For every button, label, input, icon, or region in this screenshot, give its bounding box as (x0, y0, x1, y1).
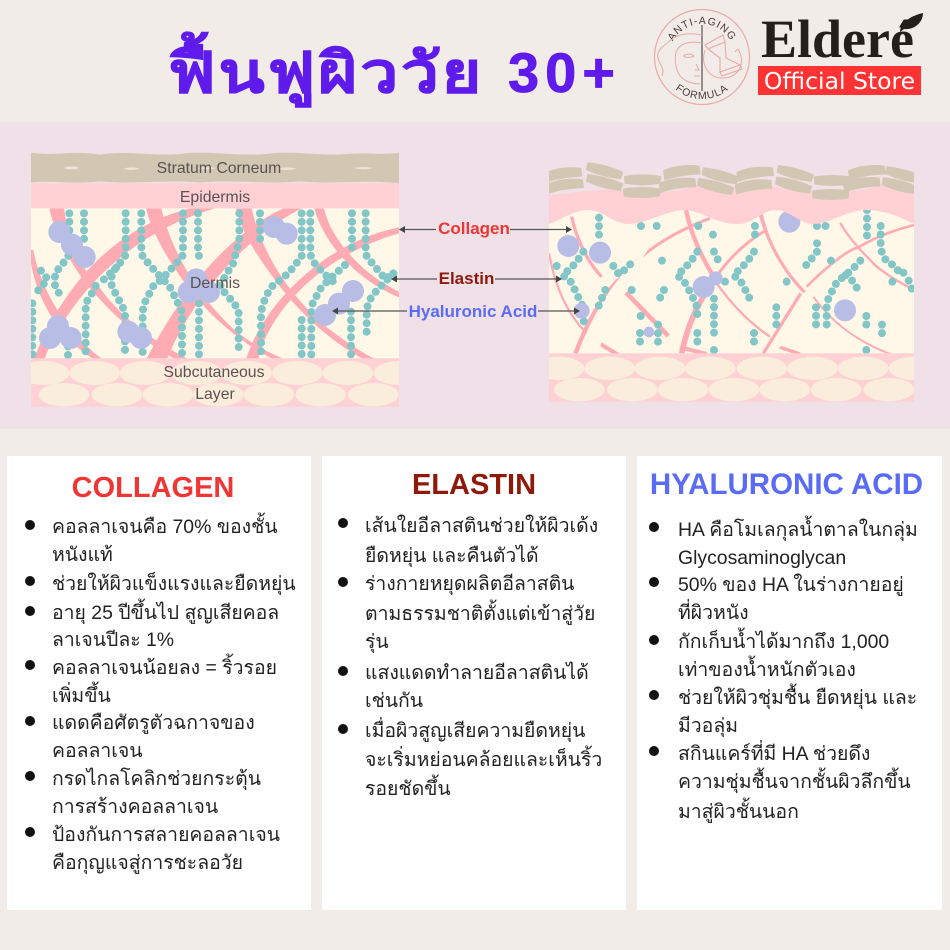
subcutaneous layer (19, 358, 424, 407)
white fibre gaps (580, 213, 808, 357)
bullet list: hyaluronic acid: มีวอลุ่ม (678, 715, 738, 737)
heading: elastin: ELASTIN (412, 469, 536, 501)
bullet list: elastin: ยืดหยุ่น และคืนตัวได้ (365, 545, 539, 567)
heading: collagen: COLLAGEN (72, 472, 234, 504)
bullet list: hyaluronic acid: Glycosaminoglycan (678, 547, 846, 569)
bullet list: collagen: กรดไกลโคลิกช่วยกระตุ้น (52, 768, 261, 790)
bullet list: hyaluronic acid: ช่วยให้ผิวชุ่มชื้น ยืดหยุ่น และ (678, 687, 917, 709)
callout: Elastin: Elastin (439, 269, 494, 288)
bullet list: collagen: หนังแท้ (52, 544, 113, 566)
epidermis layer (31, 183, 399, 208)
bullet list: collagen: ช่วยให้ผิวแข็งแรงและยืดหยุ่น (52, 573, 296, 595)
stratum corneum flakes (545, 161, 923, 200)
title: 30+ (508, 41, 621, 104)
heading: hyaluronic acid: HYALURONIC ACID (650, 468, 923, 501)
bullet list: collagen: ลาเจนปีละ 1% (52, 629, 174, 651)
icon: leaf (900, 13, 923, 32)
bullet list: elastin: เส้นใยอีลาสตินช่วยให้ผิวเด้ง (365, 515, 598, 537)
callout: Collagen: Collagen (438, 219, 510, 238)
callout: Collagen (399, 219, 572, 238)
stratum corneum layer (31, 153, 399, 183)
bullet list: hyaluronic acid: HA คือโมเลกุลน้ำตาลในกลุ่ม (678, 519, 918, 541)
bullet list: elastin: จะเริ่มหย่อนคล้อยและเห็นริ้ว (365, 749, 602, 771)
bullet list: elastin: เช่นกัน (365, 690, 423, 712)
damaged fibres (549, 210, 914, 357)
bullet list: collagen: แดดคือศัตรูตัวฉกาจของ (52, 712, 255, 734)
teal hyaluronic chains (32, 213, 393, 355)
layer labels: Layer (195, 386, 235, 403)
skin diagrams (31, 152, 914, 406)
layer labels (157, 160, 281, 403)
bullet list: elastin: เมื่อผิวสูญเสียความยืดหยุ่น (365, 720, 585, 742)
dermis layer (549, 207, 914, 357)
callout: Hyaluronic Acid: Hyaluronic Acid (409, 302, 537, 321)
bullet list: collagen (25, 512, 296, 874)
panel: collagen (7, 456, 311, 910)
callout: Elastin (391, 269, 562, 288)
dermis layer (31, 208, 399, 358)
panel: skin diagram band (0, 122, 950, 429)
layer labels: Dermis (190, 275, 240, 292)
diagram: young skin (19, 153, 424, 407)
bullet list: hyaluronic acid: ที่ผิวหนัง (678, 602, 749, 624)
subcutaneous layer (534, 353, 939, 402)
logo: anti-aging formula badge (654, 8, 750, 106)
bullet list: hyaluronic acid: เท่าของน้ำหนักตัวเอง (678, 659, 856, 681)
bullet list: elastin (338, 514, 602, 800)
bullet list: elastin: แสงแดดทำลายอีลาสตินได้ (365, 662, 589, 684)
bullet list: elastin: ตามธรรมชาติตั้งแต่เข้าสู่วัย (365, 603, 595, 625)
logo: anti-aging formula badge: ANTI-AGING (668, 16, 736, 42)
bullet list: elastin: ร่างกายหยุดผลิตอีลาสติน (365, 573, 574, 595)
layer labels: Stratum Corneum (157, 160, 281, 177)
bullet list: collagen: เพิ่มขึ้น (52, 685, 111, 707)
epidermis wave (549, 185, 914, 224)
bullet list: collagen: คอลลาเจนคือ 70% ของชั้น (52, 516, 278, 538)
callout: Hyaluronic Acid (332, 302, 580, 321)
diagram: aged skin (549, 162, 914, 402)
hyaluronic acid blobs (557, 211, 856, 337)
collagen and elastin fibres (31, 208, 399, 360)
bullet list: collagen: คือกุญแจสู่การชะลอวัย (52, 852, 243, 874)
bullet list: hyaluronic acid: ความชุ่มชื้นจากชั้นผิวลึกขึ้น (678, 771, 911, 793)
title (168, 31, 621, 108)
logo: official store badge: Official Store (764, 67, 915, 95)
logo: anti-aging formula badge: FORMULA (676, 84, 728, 100)
hyaluronic acid blobs (39, 216, 364, 349)
bullet list: hyaluronic acid: กักเก็บน้ำได้มากถึง 1,000 (678, 631, 889, 653)
bullet list: collagen: ป้องกันการสลายคอลลาเจน (52, 824, 280, 846)
panel: hyaluronic acid (637, 456, 942, 910)
bullet list: elastin: รุ่น (365, 631, 389, 653)
bullet list: hyaluronic acid (649, 516, 918, 823)
bullet list: hyaluronic acid: สกินแคร์ที่มี HA ช่วยดึง (678, 743, 870, 765)
teal hyaluronic chains (557, 210, 912, 350)
bullet list: collagen: คอลลาเจนน้อยลง = ริ้วรอย (52, 657, 277, 679)
bullet list: hyaluronic acid: มาสู่ผิวชั้นนอก (678, 801, 799, 823)
bullet list: elastin: รอยชัดขึ้น (365, 778, 451, 800)
layer labels: Subcutaneous (163, 364, 265, 381)
bullet list: collagen: คอลลาเจน (52, 740, 143, 762)
bullet list: collagen: การสร้างคอลลาเจน (52, 796, 218, 818)
layer labels: Epidermis (180, 189, 250, 206)
bullet list: hyaluronic acid: 50% ของ HA ในร่างกายอยู่ (678, 574, 904, 596)
bullet list: collagen: อายุ 25 ปีขึ้นไป สูญเสียคอล (52, 602, 279, 624)
logo: Eldere wordmark: Elderé (761, 9, 914, 69)
panel: elastin (322, 456, 626, 910)
title: ฟื้นฟูผิววัย (168, 31, 484, 107)
